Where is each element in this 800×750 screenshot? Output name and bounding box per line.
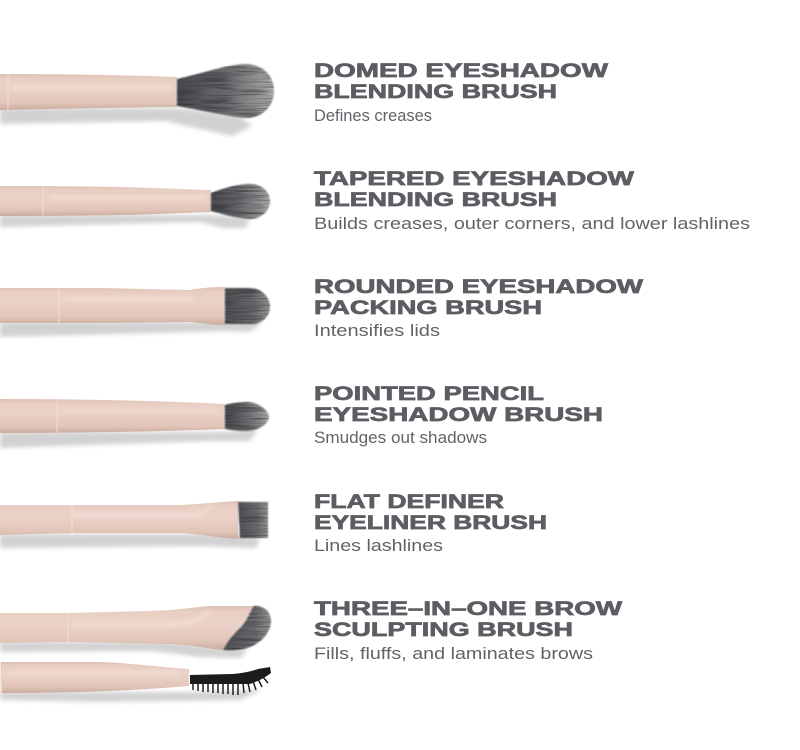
label: tapered eyeshadow blending: BLENDING BRUSH	[314, 190, 557, 211]
label: pointed pencil eyeshadow: POINTED PENCIL	[314, 384, 545, 405]
label: three-in-one brow sculpting: THREE–IN–ONE BROW	[314, 599, 622, 620]
label: pointed pencil eyeshadow: Smudges out shadows	[314, 428, 487, 447]
brush: spoolie	[0, 662, 271, 702]
brush: flat definer eyeliner	[0, 501, 268, 548]
label: rounded eyeshadow packing	[314, 277, 643, 340]
label: three-in-one brow sculpting: SCULPTING BRUSH	[314, 620, 573, 641]
label: domed eyeshadow blending: Defines creases	[314, 106, 432, 125]
label: domed eyeshadow blending: DOMED EYESHADOW	[314, 61, 608, 82]
label: tapered eyeshadow blending	[314, 169, 750, 233]
brush: domed eyeshadow blending	[0, 64, 274, 136]
label: rounded eyeshadow packing: PACKING BRUSH	[314, 298, 542, 319]
brush: rounded eyeshadow packing	[0, 287, 270, 337]
label: three-in-one brow sculpting	[314, 599, 622, 663]
label: rounded eyeshadow packing: ROUNDED EYESHADOW	[314, 277, 643, 298]
label: tapered eyeshadow blending: Builds creases, outer corners, and lower lashlines	[314, 214, 750, 233]
label: flat definer eyeliner: Lines lashlines	[314, 536, 443, 555]
label: flat definer eyeliner: EYELINER BRUSH	[314, 513, 547, 534]
label: flat definer eyeliner: FLAT DEFINER	[314, 492, 504, 513]
label: domed eyeshadow blending: BLENDING BRUSH	[314, 82, 557, 103]
brush: three-in-one brow sculpting	[0, 606, 271, 658]
label: three-in-one brow sculpting: Fills, fluffs, and laminates brows	[314, 644, 593, 663]
brush: pointed pencil eyeshadow	[0, 399, 269, 448]
label: tapered eyeshadow blending: TAPERED EYESHADOW	[314, 169, 634, 190]
label: pointed pencil eyeshadow	[314, 384, 603, 447]
label: flat definer eyeliner	[314, 492, 547, 555]
brush: tapered eyeshadow blending	[0, 184, 270, 228]
label: pointed pencil eyeshadow: EYESHADOW BRUSH	[314, 405, 603, 426]
label: rounded eyeshadow packing: Intensifies lids	[314, 321, 440, 340]
label: domed eyeshadow blending	[314, 61, 608, 125]
